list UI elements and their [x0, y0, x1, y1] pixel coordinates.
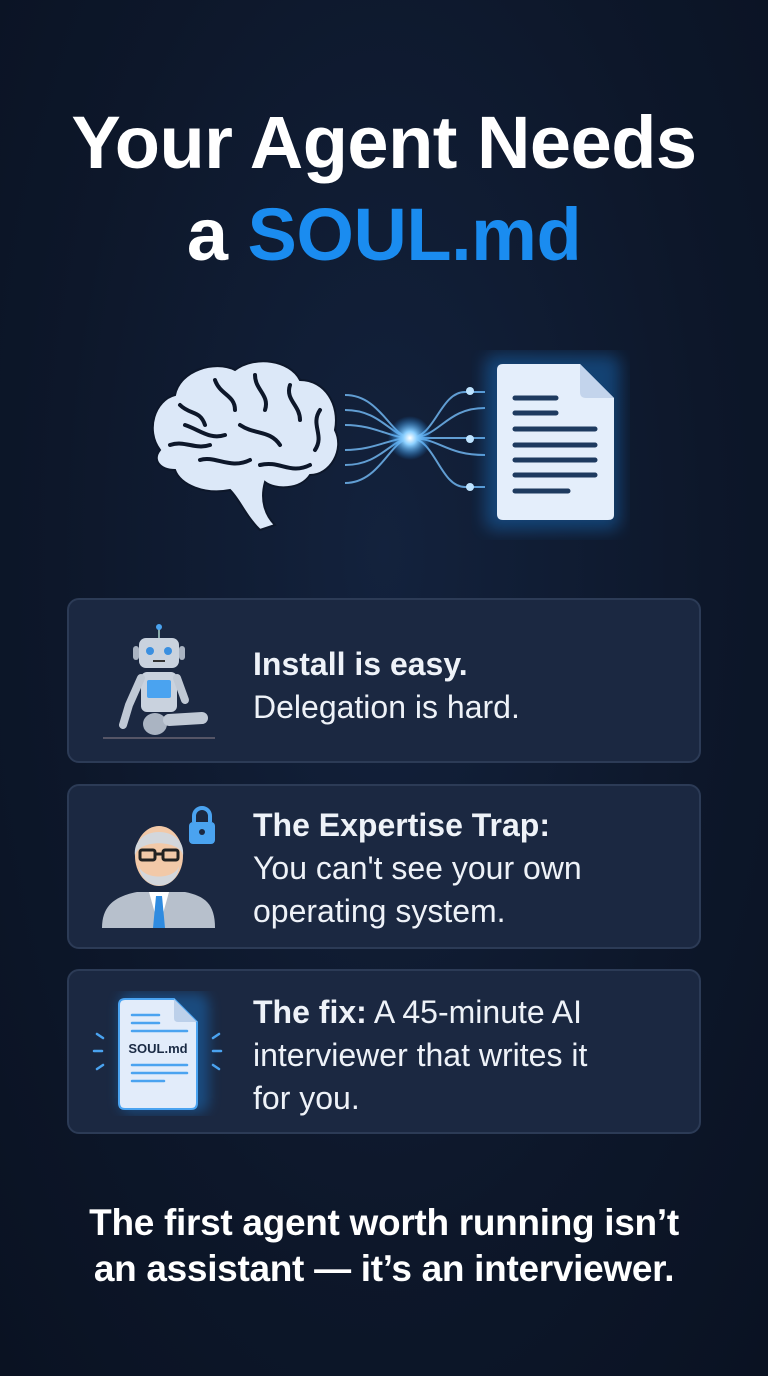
text: Install is easy. — [253, 646, 468, 682]
text: The fix: A 45-minute AI — [253, 994, 582, 1030]
text: operating system. — [253, 893, 506, 929]
panel: install is easy — [67, 598, 701, 763]
panel: the fix — [67, 969, 701, 1134]
text — [253, 807, 582, 929]
icon: brain — [153, 361, 338, 530]
text: The Expertise Trap: — [253, 807, 550, 843]
icon: SOUL.md document: SOUL.md — [128, 1041, 188, 1056]
panel: expertise trap — [67, 784, 701, 949]
footer tagline: an assistant — it’s an interviewer. — [94, 1248, 674, 1289]
footer tagline: The first agent worth running isn’t — [89, 1202, 679, 1243]
icon: expert with lock — [102, 806, 215, 928]
connection lines — [345, 392, 485, 487]
icon: robot — [103, 624, 215, 739]
footer tagline — [89, 1202, 679, 1289]
title: Your Agent Needs — [71, 101, 697, 184]
icon: SOUL.md document — [92, 991, 222, 1116]
icon: document — [485, 355, 620, 530]
title: a SOUL.md — [187, 193, 581, 276]
text — [253, 994, 588, 1116]
text: You can't see your own — [253, 850, 582, 886]
hero illustration: brain to document — [154, 350, 628, 538]
title — [71, 101, 697, 276]
text — [253, 646, 520, 725]
text: Delegation is hard. — [253, 689, 520, 725]
text: for you. — [253, 1080, 360, 1116]
text: interviewer that writes it — [253, 1037, 587, 1073]
